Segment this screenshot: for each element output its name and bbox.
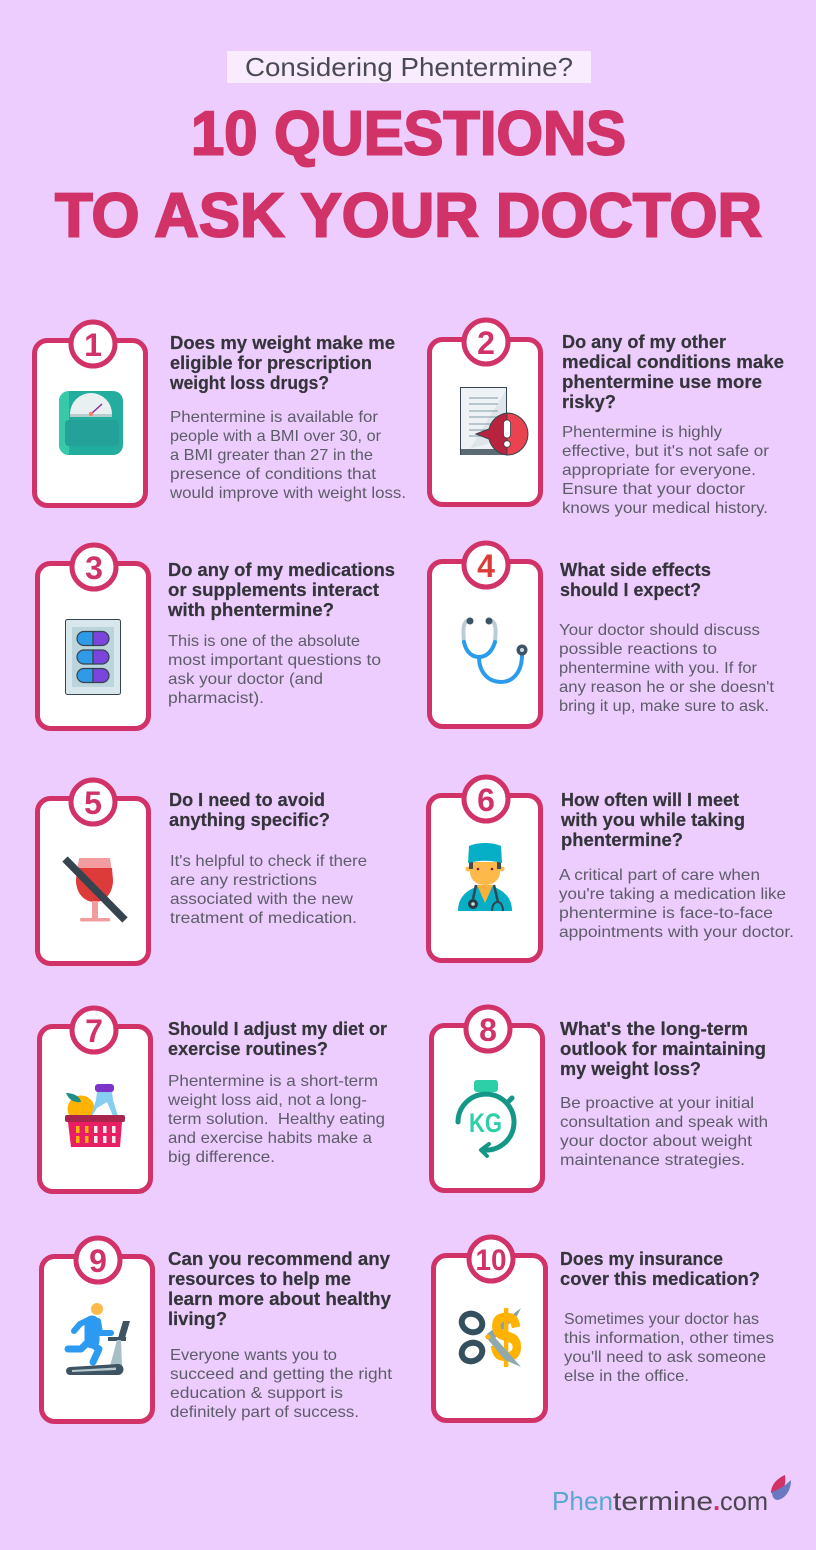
body text 4: phentermine with you. If for <box>559 660 758 677</box>
body text 9: Everyone wants you to <box>170 1347 337 1364</box>
body text 4: Your doctor should discuss <box>559 622 760 639</box>
logo: Phentermine.com: Phen <box>552 1486 613 1516</box>
panel: question 2 <box>430 320 784 517</box>
heading 4 <box>560 560 711 600</box>
number badge 5 <box>71 780 115 824</box>
icon: scissors cutting dollar sign: $ <box>491 1298 521 1376</box>
body text 7: Phentermine is a short-term <box>168 1073 378 1090</box>
body text 5: are any restrictions <box>170 872 317 889</box>
number badge 6 <box>464 777 508 821</box>
heading 8: my weight loss? <box>560 1059 701 1079</box>
body text 1: a BMI greater than 27 in the <box>170 447 373 464</box>
body text 7: big difference. <box>168 1149 275 1166</box>
body text 3: ask your doctor (and <box>168 671 323 688</box>
body text 10: this information, other times <box>564 1330 774 1347</box>
number badge 7 <box>72 1008 116 1052</box>
icon: weighing scale <box>59 391 123 455</box>
body text 5: treatment of medication. <box>170 910 357 927</box>
body text 5: It's helpful to check if there <box>170 853 367 870</box>
body text 8: Be proactive at your initial <box>560 1095 754 1112</box>
card frame 6 <box>428 796 540 960</box>
body text 4: bring it up, make sure to ask. <box>559 698 769 715</box>
heading 10 <box>560 1249 760 1289</box>
heading 1: Does my weight make me <box>170 333 395 353</box>
card frame 1 <box>34 340 146 506</box>
heading 9: learn more about healthy <box>168 1289 391 1309</box>
body text 2 <box>562 424 770 517</box>
heading 3 <box>167 560 395 620</box>
heading 7: Should I adjust my diet or <box>168 1019 387 1039</box>
body text 6: A critical part of care when <box>559 867 760 884</box>
icon: pill blister <box>66 620 120 694</box>
body text 1 <box>169 409 406 502</box>
logo: Phentermine.com: com <box>720 1486 768 1516</box>
body text 10 <box>564 1311 774 1385</box>
number badge 10 <box>469 1237 513 1281</box>
heading 2: Do any of my other <box>562 332 726 352</box>
body text 10: you'll need to ask someone <box>564 1349 766 1366</box>
body text 7 <box>167 1073 385 1166</box>
body text 6: you're taking a medication like <box>559 886 786 903</box>
heading 5: anything specific? <box>169 810 330 830</box>
heading 10: cover this medication? <box>560 1269 760 1289</box>
card frame 10 <box>434 1256 546 1420</box>
body text 9: succeed and getting the right <box>170 1366 393 1383</box>
number badge 3 <box>72 545 116 589</box>
card frame 8 <box>432 1026 542 1190</box>
number badge 5: 5 <box>84 785 102 821</box>
number badge 3: 3 <box>85 550 103 586</box>
card frame 4 <box>430 562 540 726</box>
panel: question 6 <box>428 777 794 960</box>
body text 6 <box>559 867 794 941</box>
icon: treadmill runner <box>66 1303 130 1375</box>
number badge 4 <box>464 543 508 587</box>
body text 7: weight loss aid, not a long- <box>167 1092 367 1109</box>
heading 1: weight loss drugs? <box>169 373 329 393</box>
heading 5: Do I need to avoid <box>169 790 325 810</box>
logo: Phentermine.com: termine <box>613 1486 713 1516</box>
number badge 1 <box>71 322 115 366</box>
heading 2: phentermine use more <box>562 372 762 392</box>
body text 1: Phentermine is available for <box>170 409 379 426</box>
icon: document with alert <box>460 388 528 455</box>
logo: Phentermine.com: . <box>713 1486 720 1516</box>
body text 4: possible reactions to <box>559 641 717 658</box>
number badge 2 <box>464 320 508 364</box>
body text 3: pharmacist). <box>168 690 264 707</box>
icon: crossed-out wine glass <box>65 858 125 922</box>
body text 9: definitely part of success. <box>170 1404 359 1421</box>
panel: question 10 <box>434 1237 774 1420</box>
heading 4: What side effects <box>560 560 711 580</box>
panel: question 9 <box>42 1238 393 1422</box>
heading 5 <box>169 790 330 830</box>
body text 2: Phentermine is highly <box>562 424 722 441</box>
body text 2: Ensure that your doctor <box>562 481 746 498</box>
body text 4 <box>559 622 775 715</box>
heading 2: risky? <box>562 392 616 412</box>
panel: question 1 <box>34 322 406 506</box>
heading 9: resources to help me <box>168 1269 351 1289</box>
number badge 2: 2 <box>477 325 495 361</box>
heading 1 <box>169 333 395 393</box>
card frame 2 <box>430 340 540 504</box>
body text 5 <box>170 853 367 927</box>
body text 2: appropriate for everyone. <box>562 462 756 479</box>
icon: stethoscope <box>463 618 528 682</box>
heading 6: How often will I meet <box>561 790 739 810</box>
heading 4: should I expect? <box>560 580 701 600</box>
body text 4: any reason he or she doesn't <box>559 679 775 696</box>
body text 7: term solution. Healthy eating <box>168 1111 385 1128</box>
icon: kg stopwatch: KG <box>469 1108 502 1138</box>
heading 2: medical conditions make <box>562 352 784 372</box>
icon: grocery basket <box>65 1084 125 1147</box>
heading 6: with you while taking <box>560 810 745 830</box>
logo: Phentermine.com <box>552 1475 791 1516</box>
body text 1: presence of conditions that <box>170 466 377 483</box>
body text 3: most important questions to <box>168 652 381 669</box>
heading 10: Does my insurance <box>560 1249 723 1269</box>
card frame 5 <box>38 798 148 964</box>
number badge 8: 8 <box>479 1012 497 1048</box>
panel: question 5 <box>38 780 367 964</box>
icon: kg stopwatch <box>458 1080 514 1156</box>
card frame 7 <box>40 1026 150 1192</box>
body text 9 <box>170 1347 393 1421</box>
heading 2 <box>562 332 784 412</box>
body text 6: appointments with your doctor. <box>559 924 794 941</box>
heading 6: phentermine? <box>561 830 683 850</box>
heading 1: eligible for prescription <box>170 353 372 373</box>
heading 3: with phentermine? <box>167 600 334 620</box>
body text 1: people with a BMI over 30, or <box>170 428 382 445</box>
heading 9 <box>168 1249 391 1329</box>
panel: question 7 <box>40 1008 387 1192</box>
heading 6 <box>560 790 745 850</box>
body text 2: knows your medical history. <box>562 500 768 517</box>
heading 8: outlook for maintaining <box>560 1039 766 1059</box>
card frame 9 <box>42 1256 152 1422</box>
number badge 10: 10 <box>476 1244 506 1277</box>
heading 8: What's the long-term <box>560 1019 748 1039</box>
body text 3 <box>168 633 381 707</box>
panel: question 3 <box>38 545 395 728</box>
body text 6: phentermine is face-to-face <box>559 905 773 922</box>
number badge 4: 4 <box>477 548 495 584</box>
panel: question 4 <box>430 543 775 726</box>
body text 7: and exercise habits make a <box>168 1130 372 1147</box>
title <box>55 100 762 250</box>
body text 10: else in the office. <box>564 1368 689 1385</box>
heading 8 <box>560 1019 766 1079</box>
body text 10: Sometimes your doctor has <box>564 1311 759 1328</box>
number badge 7: 7 <box>85 1013 103 1049</box>
body text 9: education & support is <box>170 1385 343 1402</box>
body text 5: associated with the new <box>170 891 353 908</box>
body text 1: would improve with weight loss. <box>169 485 406 502</box>
title: 10 QUESTIONS <box>191 100 626 168</box>
heading 9: Can you recommend any <box>168 1249 390 1269</box>
number badge 9 <box>76 1238 120 1282</box>
body text 3: This is one of the absolute <box>168 633 360 650</box>
heading 7 <box>168 1019 387 1059</box>
card frame 3 <box>38 564 148 728</box>
body text 2: effective, but it's not safe or <box>562 443 770 460</box>
body text 8 <box>560 1095 768 1169</box>
title: TO ASK YOUR DOCTOR <box>55 182 762 250</box>
number badge 9: 9 <box>89 1243 107 1279</box>
body text 8: maintenance strategies. <box>560 1152 745 1169</box>
body text 8: consultation and speak with <box>560 1114 768 1131</box>
subtitle: Considering Phentermine? <box>245 52 573 82</box>
icon: scissors cutting dollar sign <box>459 1298 521 1376</box>
heading 9: living? <box>168 1309 227 1329</box>
number badge 1: 1 <box>84 327 102 363</box>
icon: doctor <box>458 843 512 911</box>
number badge 8 <box>466 1007 510 1051</box>
body text 8: your doctor about weight <box>560 1133 753 1150</box>
number badge 6: 6 <box>477 782 495 818</box>
panel: question 8 <box>432 1007 768 1190</box>
heading 7: exercise routines? <box>168 1039 328 1059</box>
heading 3: or supplements interact <box>168 580 379 600</box>
heading 3: Do any of my medications <box>168 560 395 580</box>
